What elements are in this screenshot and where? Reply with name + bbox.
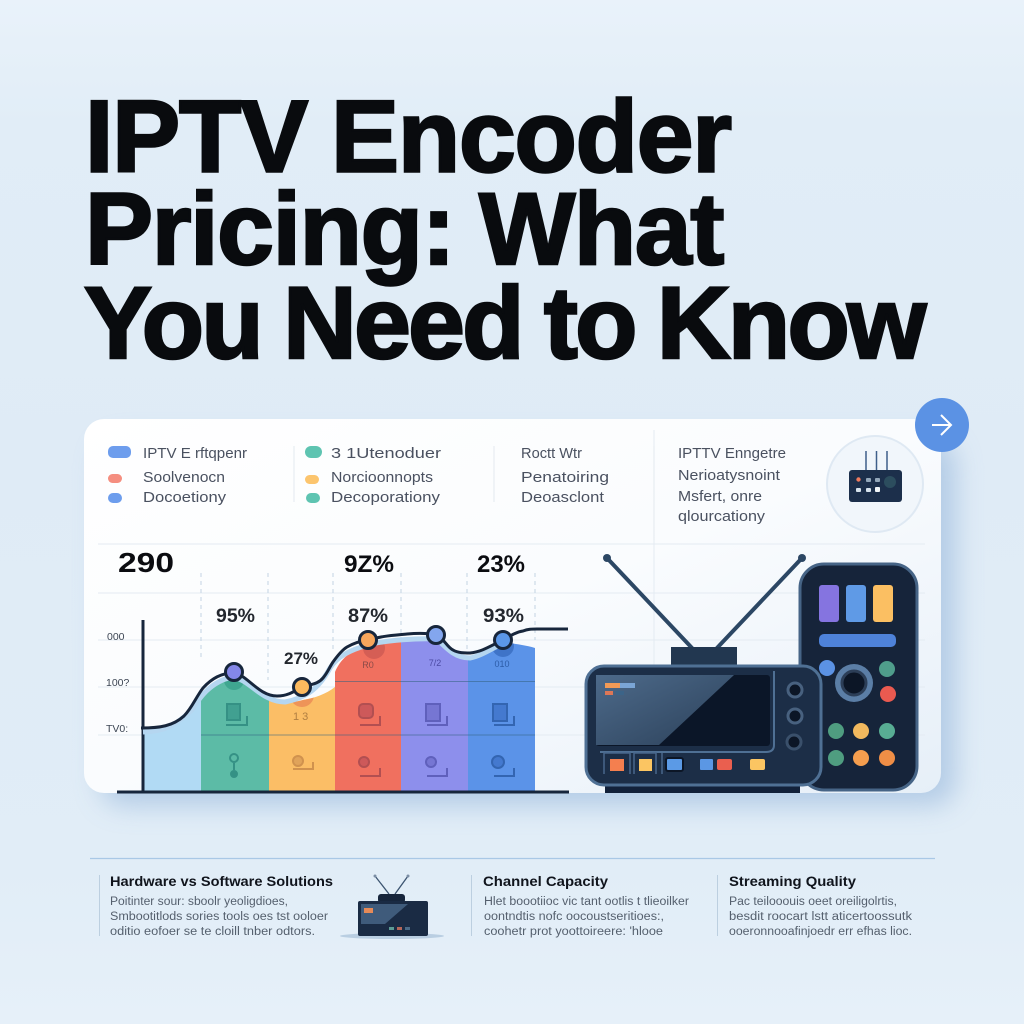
chart axes [117,620,569,792]
stat labels: 23% [477,551,525,578]
text block: streaming quality: ooeronnooafinjoedr err efhas lioc. [729,926,912,938]
text block: streaming quality: Pac teilooouis oeet oreiligolrtis, [729,896,897,908]
legend column 1: Docoetiony [143,489,227,506]
illustration: encoder box [586,554,821,793]
text block: streaming quality: besdit roocart lstt aticertoossutk [729,911,912,923]
y axis labels: 100? [106,677,130,689]
legend column 4: IPTTV Enngetre [678,445,786,462]
stat labels: 27% [284,649,318,668]
text block: hardware vs software [100,874,333,938]
legend column 3: Roctt Wtr [521,445,582,462]
text block: channel capacity: coohetr prot yoottoireere: 'hlooe [484,926,663,938]
text block: channel capacity [472,874,689,938]
text block: hardware vs software: Hardware vs Software Solutions [110,874,333,889]
stat labels: 9Z% [344,551,394,578]
title: IPTV Encoder [85,80,731,194]
text block: channel capacity: oontndtis nofc oocoustseritioes:, [484,911,664,923]
legend column 4 [654,445,786,540]
stat labels: 290 [118,547,174,578]
legend column 3: Penatoiring [521,469,609,486]
y axis labels: 000 [107,631,125,643]
legend column 1: IPTV E rftqpenr [143,445,247,462]
text block: channel capacity: Hlet boootiioc vic tant ootlis t tlieoilker [484,896,689,908]
title: You Need to Know [84,266,927,380]
icon: small encoder [340,874,444,939]
legend column 2: 3 1Utenoduer [331,445,441,462]
legend column 4: Msfert, onre [678,488,762,505]
legend column 4: Nerioatysnoint [678,467,781,484]
area chart [144,641,535,790]
trend line [141,629,568,728]
card shadow [100,440,956,806]
title [84,80,927,380]
legend column 1: Soolvenocn [143,469,225,486]
text block: streaming quality [718,874,912,938]
stat labels: 87% [348,606,388,627]
trend line halo [143,639,503,732]
text block: hardware vs software: oditio eofoer se te cloill tnber odtors. [110,926,315,938]
legend column 4: qlourcationy [678,508,766,525]
icon: arrow button [915,398,969,452]
stat labels: 95% [216,606,255,627]
area chart: 7/2 [429,658,441,668]
text block: channel capacity: Channel Capacity [483,874,609,889]
area chart: 010 [494,659,510,669]
column icons: 1 3 [293,711,308,723]
divider [90,858,935,860]
panel: chart card [84,419,941,793]
legend column 2 [294,445,441,506]
legend column 2: Decoporationy [331,489,441,506]
legend column 3: Deoasclont [521,489,605,506]
title: Pricing: What [85,172,723,286]
text block: hardware vs software: Poitinter sour: sboolr yeoligdioes, [110,896,288,908]
text block: streaming quality: Streaming Quality [729,874,857,889]
y axis labels: TV0: [106,723,128,735]
text block: hardware vs software: Smbootitlods sories tools oes tst ooloer [110,911,328,923]
stat labels: 93% [483,606,524,627]
stat labels [118,547,525,668]
legend column 1 [108,445,247,506]
y axis labels [106,631,130,735]
legend column 2: Norcioonnopts [331,469,433,486]
chart nodes [226,626,512,696]
icon: encoder badge [827,436,923,532]
area chart: R0 [362,660,374,670]
column icons [226,704,514,777]
illustration: remote control [800,564,917,790]
legend column 3 [494,445,609,506]
